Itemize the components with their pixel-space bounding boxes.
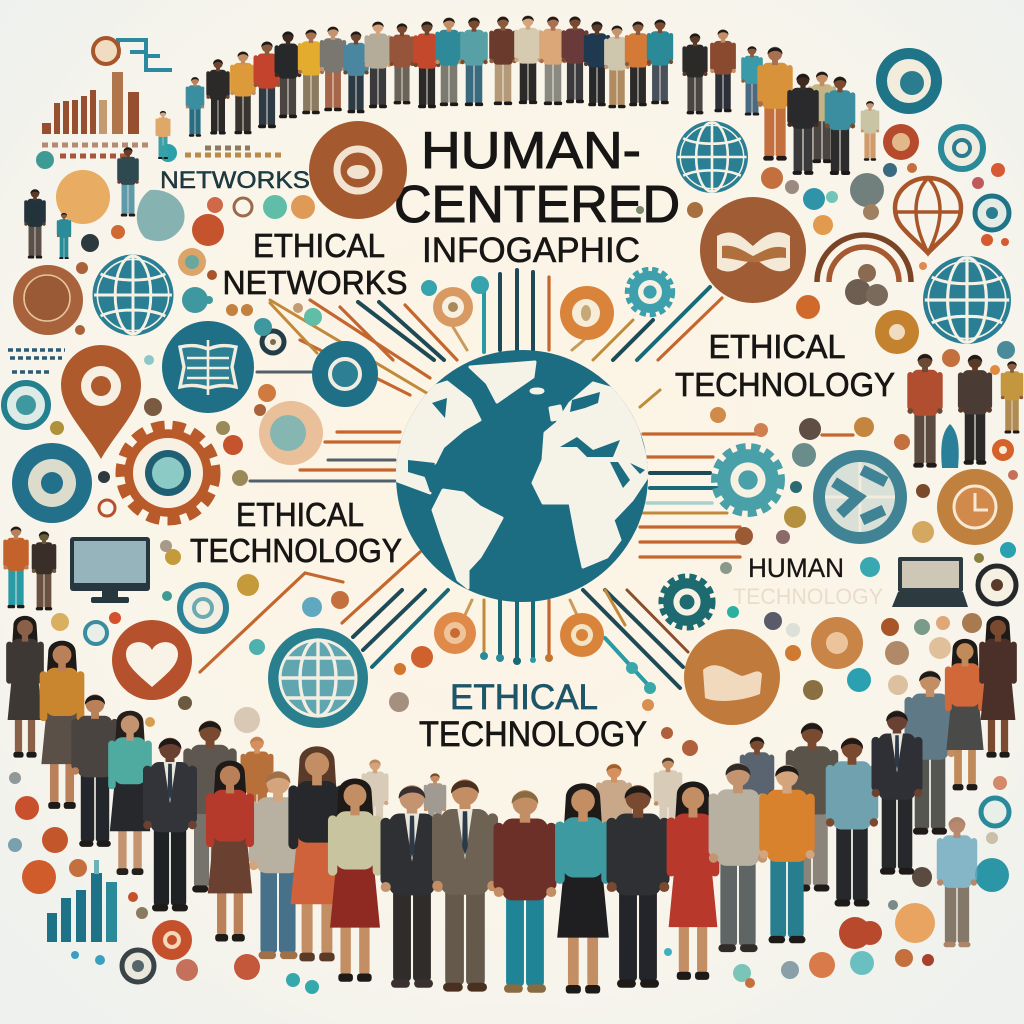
icon: soft blobs middle left	[51, 435, 433, 733]
label: ethical networks: NETWORKS	[222, 264, 408, 301]
people: left side figures	[3, 111, 170, 610]
icon: ring top left	[93, 38, 119, 64]
title: CENTERED	[394, 176, 680, 234]
icons: left side	[4, 38, 433, 994]
icons: right side	[434, 341, 1018, 988]
icon: brown textured disc	[13, 265, 83, 335]
icon: teal gear badge	[12, 443, 92, 523]
icon: diamond balloon	[895, 178, 961, 253]
icon: bar chart bottom left	[47, 860, 117, 942]
connector rays radiating from globe	[200, 270, 853, 688]
icon: teal small gear	[628, 270, 672, 314]
icon: blue panel chart	[118, 40, 172, 70]
icon: small teal dot	[85, 622, 107, 644]
icon: brown chat badge	[309, 121, 407, 219]
icon: teal network disc	[813, 450, 907, 544]
icon: small teal ring left	[4, 383, 48, 427]
icon: globe right	[923, 256, 1011, 344]
icon: orange badge	[433, 287, 473, 327]
icon: globe lower left	[268, 628, 368, 728]
icon: brown hands badge	[700, 197, 806, 303]
icon: globe upper left	[92, 254, 174, 336]
icon: heart badge	[112, 620, 192, 700]
icon: orange gear	[122, 427, 214, 519]
icon: orange pin badge	[560, 286, 614, 340]
icon: soft blobs upper left	[36, 144, 322, 435]
icon: arcs	[817, 235, 911, 306]
icon: top right radial badge	[876, 48, 942, 114]
label: ethical technology bottom: ETHICAL	[450, 678, 598, 717]
icon: brown landscape badge	[684, 629, 780, 725]
icon: ring badges right	[636, 124, 1009, 354]
label: human technology: HUMAN	[748, 553, 844, 583]
icons: upper middle	[421, 48, 1011, 354]
label: ethical technology bottom	[419, 678, 647, 754]
people: right side figures	[907, 354, 1023, 468]
label: ethical networks	[222, 227, 408, 301]
icon: soft teal and peach blob	[259, 401, 323, 465]
icon: left squiggle marks	[8, 350, 65, 372]
icon: at sign teal	[180, 585, 226, 631]
label: ethical technology left: TECHNOLOGY	[190, 532, 402, 569]
icon: teal gear badge right	[715, 447, 781, 513]
title	[394, 122, 680, 270]
icon: pin and dots centre bottom	[434, 612, 604, 657]
people: foreground crowd	[6, 616, 1017, 994]
icon: ring e	[978, 566, 1016, 604]
label: human technology: TECHNOLOGY	[733, 584, 883, 609]
icon: bottom left dots and rings	[8, 772, 319, 994]
label: ethical technology bottom: TECHNOLOGY	[419, 715, 647, 754]
label: ethical technology left: ETHICAL	[236, 496, 364, 533]
icon: location pin	[61, 345, 141, 459]
label: human technology	[733, 553, 883, 609]
icon: small ring	[262, 331, 284, 353]
icon: teal blobs near badge	[421, 276, 489, 296]
icon: laptop	[892, 557, 968, 607]
icon: ray end dots	[480, 652, 656, 694]
icon: faded text row	[42, 145, 285, 156]
icon: orange clock	[937, 469, 1013, 545]
subtitle: INFOGAPHIC	[422, 231, 640, 270]
title: HUMAN-	[421, 122, 641, 180]
icon: teal leaf badge	[312, 341, 378, 407]
icon: book badge	[162, 321, 254, 413]
people: top row	[186, 15, 879, 175]
seas	[408, 392, 645, 492]
icon: scattered dots right	[642, 341, 1018, 988]
label: ethical technology right	[675, 328, 895, 403]
label: networks small: NETWORKS	[160, 167, 310, 194]
icon: monitor	[70, 537, 150, 603]
icon: teal globe top centre	[676, 121, 748, 193]
icon: bar chart top left	[42, 72, 139, 134]
label: ethical technology left	[190, 496, 402, 569]
label: ethical technology right: TECHNOLOGY	[675, 366, 895, 403]
icon: small orange badge	[811, 617, 863, 669]
globe	[395, 350, 650, 602]
label: ethical technology right: ETHICAL	[708, 328, 846, 365]
continents	[395, 362, 650, 588]
label: ethical networks: ETHICAL	[253, 227, 385, 264]
icon: teal gear bottom	[662, 577, 712, 627]
